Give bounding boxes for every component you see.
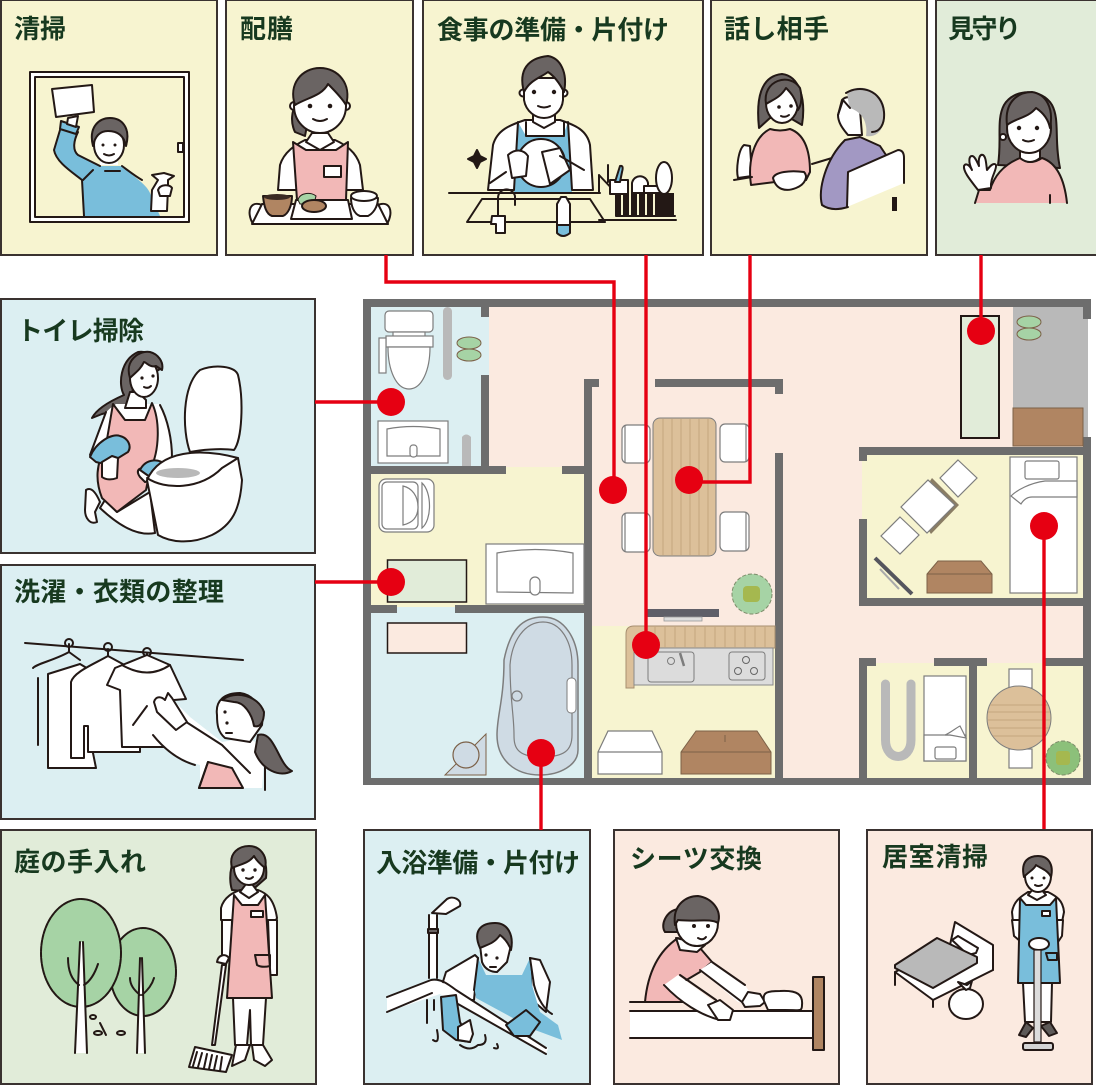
panel: 話し相手 bbox=[711, 0, 927, 255]
illustration: woman with broom bbox=[189, 846, 277, 1072]
heading: 配膳: 配膳 bbox=[240, 14, 293, 44]
lower room: round table, chairs, plant bbox=[987, 669, 1080, 775]
lower room: bed and handrail bbox=[886, 676, 966, 761]
heading: 見守り: 見守り bbox=[948, 14, 1021, 44]
panel: 洗濯・衣類の整理 bbox=[1, 565, 315, 819]
entrance: mat, slippers, shoe cabinet bbox=[961, 316, 1083, 446]
panel: 居室清掃 bbox=[867, 830, 1092, 1084]
floors bbox=[371, 307, 1088, 780]
connector lines bbox=[315, 255, 1044, 830]
marker dots bbox=[377, 317, 1058, 767]
plant bbox=[732, 574, 772, 614]
panel: 食事の準備・片付け bbox=[423, 0, 703, 255]
toilet room fixtures bbox=[378, 307, 481, 466]
illustration: man cleaning bath bbox=[387, 898, 562, 1054]
panel: 見守り bbox=[936, 0, 1096, 255]
heading: 入浴準備・片付け: 入浴準備・片付け bbox=[376, 848, 580, 878]
illustration: man with vacuum cleaner bbox=[1012, 856, 1064, 1050]
dining table and chairs bbox=[622, 418, 749, 556]
heading: 庭の手入れ: 庭の手入れ bbox=[14, 847, 146, 877]
illustration: woman serving meal tray bbox=[250, 68, 390, 224]
fridge and cabinet bbox=[598, 731, 771, 774]
panel: シーツ交換 bbox=[614, 830, 839, 1084]
panel: 庭の手入れ bbox=[1, 830, 316, 1084]
illustration: man washing dishes bbox=[449, 56, 676, 236]
heading: シーツ交換: シーツ交換 bbox=[630, 844, 762, 874]
heading: トイレ掃除: トイレ掃除 bbox=[17, 316, 144, 346]
bedroom furniture bbox=[875, 457, 1077, 594]
laundry room fixtures bbox=[379, 479, 584, 604]
illustration: woman cleaning toilet bbox=[85, 352, 242, 541]
illustration: woman changing bed sheets bbox=[630, 896, 824, 1050]
illustration: man cleaning window bbox=[30, 72, 189, 222]
kitchen bbox=[626, 609, 775, 688]
heading: 洗濯・衣類の整理: 洗濯・衣類の整理 bbox=[14, 577, 224, 607]
panel: 配膳 bbox=[226, 0, 413, 255]
illustration: woman waving bbox=[964, 92, 1067, 203]
walls bbox=[363, 299, 1091, 785]
illustration: trees bbox=[41, 899, 176, 1053]
illustration: two people talking bbox=[734, 74, 904, 211]
illustration: woman folding hanging clothes bbox=[25, 639, 292, 790]
heading: 清掃: 清掃 bbox=[14, 14, 66, 44]
heading: 居室清掃: 居室清掃 bbox=[882, 842, 988, 872]
panel: トイレ掃除 bbox=[1, 299, 315, 553]
bathroom fixtures bbox=[388, 617, 578, 775]
panel: 清掃 bbox=[1, 0, 217, 255]
panel: 入浴準備・片付け bbox=[364, 830, 590, 1084]
illustration: bed with laundry bag bbox=[895, 922, 993, 1019]
heading: 食事の準備・片付け: 食事の準備・片付け bbox=[437, 15, 669, 45]
floor plan bbox=[363, 299, 1091, 785]
heading: 話し相手: 話し相手 bbox=[724, 14, 829, 44]
